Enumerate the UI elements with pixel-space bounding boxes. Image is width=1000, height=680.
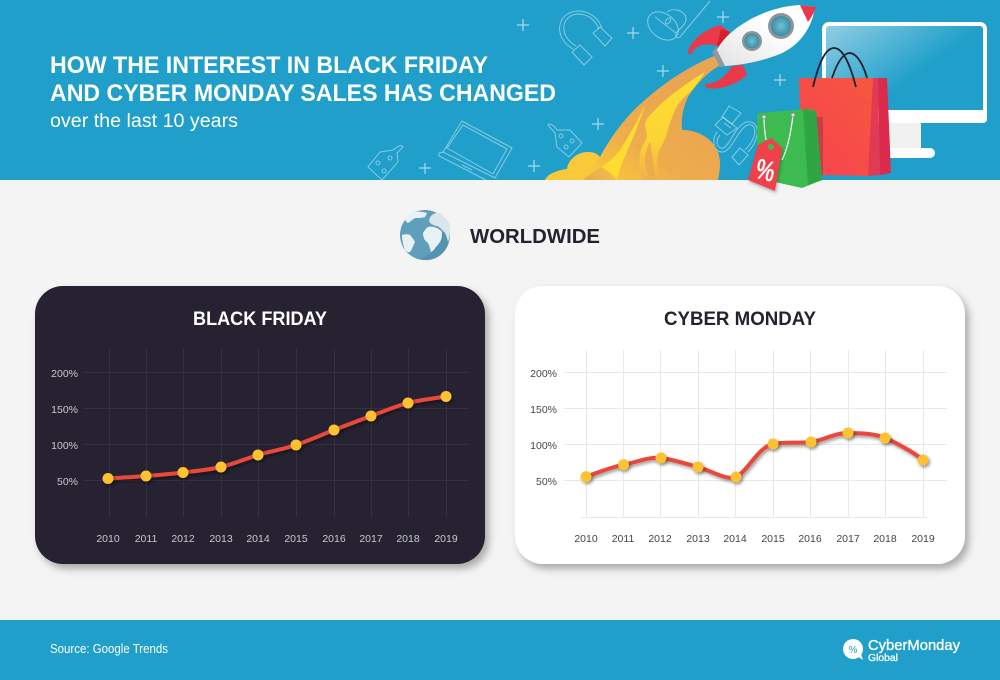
logo: CyberMonday Global: % — [849, 645, 858, 656]
logo: CyberMonday Global: Global — [868, 652, 898, 664]
chart: cyber monday line: 50% — [536, 476, 557, 488]
rocket fins — [688, 25, 730, 55]
chart: black friday line: 200% — [51, 368, 78, 380]
chart: black friday line — [51, 349, 468, 545]
source note: Source: Google Trends — [50, 642, 168, 656]
chart: cyber monday line: 2012 — [648, 533, 672, 545]
chart: cyber monday line: 150% — [530, 404, 557, 416]
rocket body — [717, 5, 815, 66]
icon: headphones — [560, 11, 612, 65]
rocket windows — [768, 13, 794, 39]
rocket nozzle — [712, 47, 727, 67]
heading: black friday: BLACK FRIDAY — [193, 309, 327, 330]
logo: CyberMonday Global: CyberMonday — [868, 637, 960, 654]
icon: laptop — [439, 121, 512, 180]
chart: black friday line: 2011 — [135, 533, 157, 545]
chart: black friday line: 50% — [57, 476, 78, 488]
panel: cyber monday — [515, 286, 965, 564]
icon: rocket — [688, 5, 816, 88]
plus signs — [419, 11, 786, 174]
title: HOW THE INTEREST IN BLACK FRIDAY — [50, 52, 488, 79]
icon: red shopping bag — [799, 48, 891, 176]
chart: black friday line: 2017 — [359, 533, 383, 545]
chart: black friday line: 150% — [51, 404, 78, 416]
chart: black friday line: 2012 — [171, 533, 195, 545]
icon: usb cable — [714, 106, 757, 165]
subtitle: over the last 10 years — [50, 111, 238, 132]
chart: cyber monday line: 2015 — [761, 533, 785, 545]
chart: cyber monday line: 200% — [530, 368, 557, 380]
title — [50, 52, 556, 132]
logo: CyberMonday Global — [843, 637, 960, 664]
chart: black friday line: 2019 — [434, 533, 458, 545]
icon: green shopping bag — [757, 109, 822, 188]
heading: worldwide: WORLDWIDE — [470, 226, 600, 248]
chart: cyber monday line: 2014 — [723, 533, 747, 545]
chart: cyber monday line — [530, 350, 947, 545]
chart: cyber monday line: 2013 — [686, 533, 710, 545]
icon: globe — [400, 210, 450, 260]
rocket nose — [800, 5, 816, 22]
icon: red discount tag — [748, 138, 782, 191]
icon: price tag right — [548, 124, 582, 157]
heading: cyber monday: CYBER MONDAY — [664, 309, 816, 330]
title: AND CYBER MONDAY SALES HAS CHANGED — [50, 80, 556, 107]
footer bar — [0, 620, 1000, 680]
panel: black friday — [35, 286, 485, 564]
chart: black friday line: 2015 — [284, 533, 308, 545]
percent glyph: % — [752, 153, 778, 189]
chart: black friday line: 2018 — [396, 533, 420, 545]
chart: cyber monday line: 2016 — [798, 533, 822, 545]
chart: cyber monday line: 2017 — [836, 533, 860, 545]
icon: computer monitor — [822, 24, 987, 158]
chart: black friday line: 100% — [51, 440, 78, 452]
chart: black friday line: 2014 — [246, 533, 270, 545]
icon: computer mouse — [642, 1, 710, 46]
chart: black friday line: 2010 — [96, 533, 120, 545]
chart: black friday line: 2016 — [322, 533, 346, 545]
rocket flame — [545, 56, 721, 180]
chart: cyber monday line: 2011 — [612, 533, 634, 545]
chart: cyber monday line: 2010 — [574, 533, 598, 545]
chart: cyber monday line: 2019 — [911, 533, 935, 545]
icon: price tag left — [368, 146, 403, 180]
chart: cyber monday line: 100% — [530, 440, 557, 452]
header banner — [0, 0, 1000, 191]
chart: black friday line: 2013 — [209, 533, 233, 545]
chart: cyber monday line: 2018 — [873, 533, 897, 545]
background line icons — [368, 1, 757, 180]
